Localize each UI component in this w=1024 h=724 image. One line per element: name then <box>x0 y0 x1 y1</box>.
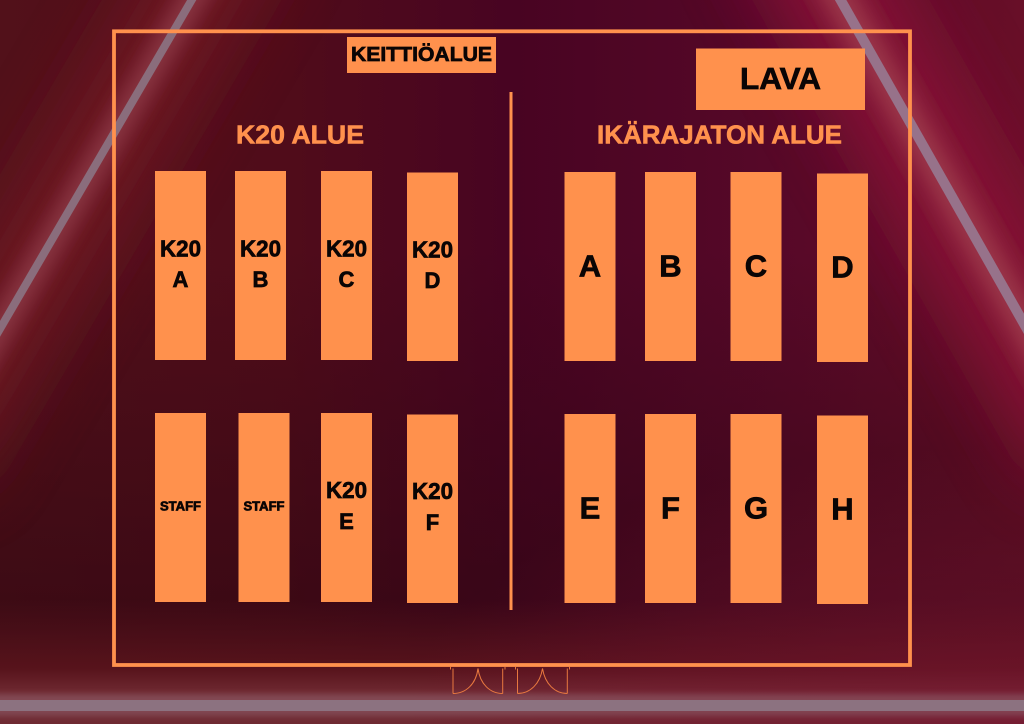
table H: H <box>831 492 854 526</box>
table K20 F: K20 <box>412 478 453 504</box>
table A: A <box>579 248 601 284</box>
table K20 F: F <box>426 510 439 535</box>
table K20 D: K20 <box>412 236 453 262</box>
icon: entrance door left <box>450 667 505 694</box>
table G <box>730 414 782 603</box>
table B <box>645 172 696 361</box>
light beam floor <box>0 700 1024 711</box>
table K20 B: K20 <box>240 236 281 262</box>
table K20 D <box>407 172 458 361</box>
light beam left <box>0 0 250 466</box>
table K20 C: C <box>339 267 355 292</box>
divider between areas <box>510 92 512 610</box>
table K20 A <box>155 171 206 360</box>
table K20 C <box>321 171 372 360</box>
table F: F <box>661 490 680 526</box>
stage <box>696 48 865 110</box>
table K20 D: D <box>425 268 440 293</box>
table staff 2: STAFF <box>244 498 285 514</box>
table staff 1: STAFF <box>160 498 201 514</box>
table A <box>564 172 616 361</box>
table C <box>730 172 782 361</box>
table B: B <box>659 248 682 284</box>
table E <box>564 414 616 603</box>
table C: C <box>745 248 767 284</box>
heading: all ages area: IKÄRAJATON ALUE <box>597 120 842 150</box>
light beam right <box>784 0 1024 458</box>
table K20 E <box>321 413 372 602</box>
table F <box>645 414 696 603</box>
kitchen area label <box>347 37 496 73</box>
table D: D <box>831 250 854 284</box>
kitchen area label: KEITTIÖALUE <box>351 43 492 66</box>
heading: K20 area: K20 ALUE <box>236 120 364 150</box>
venue outline <box>114 31 910 665</box>
table K20 A: A <box>173 267 189 292</box>
table K20 B <box>235 171 286 360</box>
icon: entrance door right <box>516 667 570 694</box>
table K20 A: K20 <box>160 236 201 262</box>
table K20 E: E <box>339 509 354 534</box>
table G: G <box>744 490 768 526</box>
stage: LAVA <box>740 61 821 96</box>
table E: E <box>580 490 600 526</box>
table K20 C: K20 <box>326 236 367 262</box>
table K20 B: B <box>253 267 268 292</box>
table staff 2 <box>238 413 290 602</box>
table K20 F <box>407 414 458 603</box>
table H <box>817 416 868 604</box>
table staff 1 <box>155 413 206 602</box>
table D <box>817 174 868 362</box>
table K20 E: K20 <box>326 477 367 503</box>
